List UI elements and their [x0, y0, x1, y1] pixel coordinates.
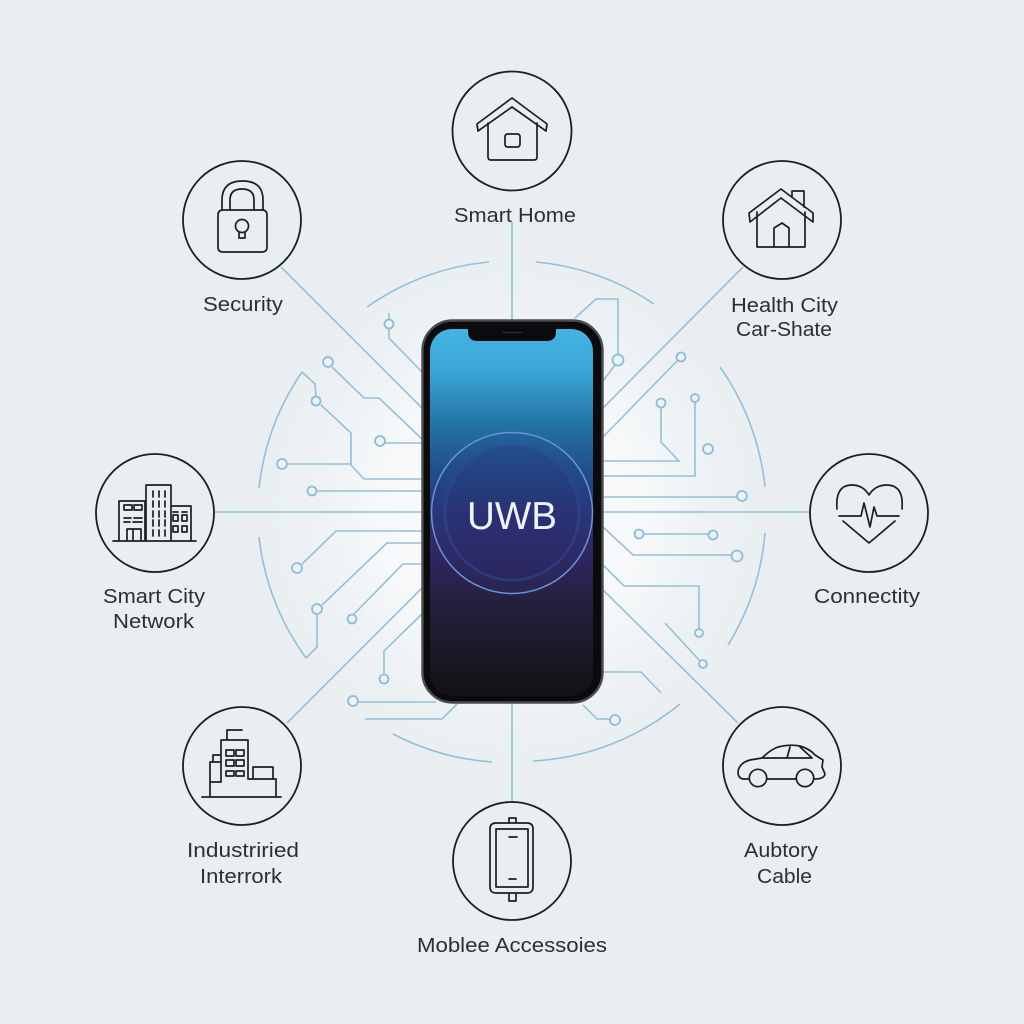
label: Security: [203, 294, 283, 316]
right traces: [575, 299, 737, 719]
label: Smart Home: [454, 205, 576, 227]
label: Aubtory: [744, 840, 818, 862]
icon: heart with pulse: [837, 485, 902, 543]
UWB label: UWB: [467, 495, 557, 538]
phone body: [422, 320, 602, 702]
label: Connectity: [814, 586, 920, 608]
node: industrial: [183, 707, 301, 888]
icon: phone case: [490, 818, 533, 901]
icon: car: [738, 745, 825, 779]
circle: [452, 72, 572, 190]
label: Smart City: [103, 586, 205, 608]
label: Industriried: [187, 840, 299, 862]
circle: [183, 707, 301, 825]
label: Moblee Accessoies: [417, 935, 607, 957]
label line two: Car-Shate: [736, 319, 832, 341]
center glow: [222, 222, 802, 802]
notch: [468, 329, 556, 341]
UWB ring: [432, 432, 592, 594]
icon: house with chimney: [749, 189, 813, 247]
outer arcs: [259, 262, 765, 762]
label: Health City: [731, 295, 838, 317]
circle: [723, 161, 841, 279]
nodes: [277, 320, 747, 725]
node: smart city: [96, 454, 214, 633]
circle: [810, 454, 928, 572]
label line two: Interrork: [200, 866, 283, 888]
main spokes: [214, 222, 811, 802]
node: health city: [723, 161, 841, 341]
node: connectivity: [810, 454, 928, 608]
circuit network: [214, 222, 811, 802]
icon: padlock: [218, 181, 267, 252]
icon: house: [477, 98, 547, 160]
phone: [422, 320, 602, 702]
node: automotive: [723, 707, 841, 888]
UWB disc: [445, 446, 579, 580]
node: security: [183, 161, 301, 316]
node: mobile accessories: [417, 802, 607, 957]
phone screen: [430, 329, 593, 696]
icon: city buildings: [113, 485, 196, 541]
speaker: [502, 332, 523, 334]
left traces: [287, 313, 458, 719]
circle: [96, 454, 214, 572]
label line two: Cable: [757, 866, 812, 888]
wheels: [749, 769, 814, 787]
icon: factory: [202, 730, 281, 797]
circle: [453, 802, 571, 920]
circle: [723, 707, 841, 825]
circle: [183, 161, 301, 279]
label line two: Network: [113, 611, 195, 633]
node: smart home: [452, 72, 576, 227]
